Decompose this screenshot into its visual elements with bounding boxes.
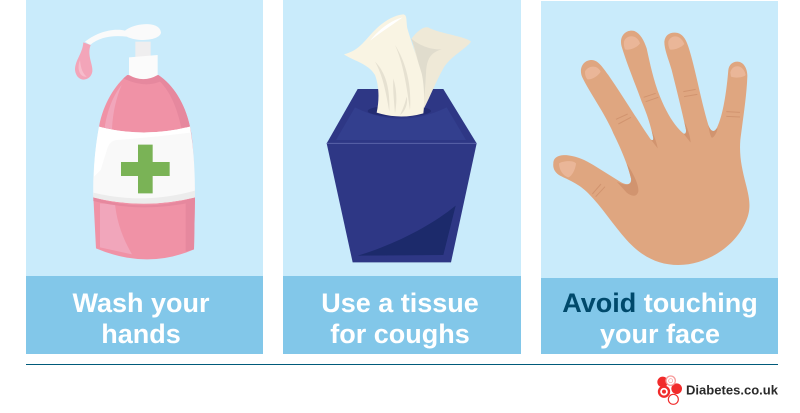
divider line [26,364,778,365]
caption band [283,276,521,354]
icon: hand [553,31,749,265]
icon: soap pump bottle [75,24,195,259]
caption text: Wash your [72,288,210,318]
logo: Diabetes.co.uk [657,376,779,404]
panel: use a tissue [283,0,521,354]
caption band [26,276,263,354]
icon: tissue box [327,14,477,262]
icon: logo circles [657,376,682,404]
caption text: Avoid touching [562,288,758,318]
caption text: your face [600,319,720,349]
caption text: hands [101,319,181,349]
panel: wash your hands [26,0,263,354]
caption text: Use a tissue [321,288,479,318]
caption band [541,278,778,354]
panel: avoid touching your face [541,1,778,354]
caption text: for coughs [330,319,470,349]
logo wordmark: Diabetes.co.uk [686,382,779,398]
